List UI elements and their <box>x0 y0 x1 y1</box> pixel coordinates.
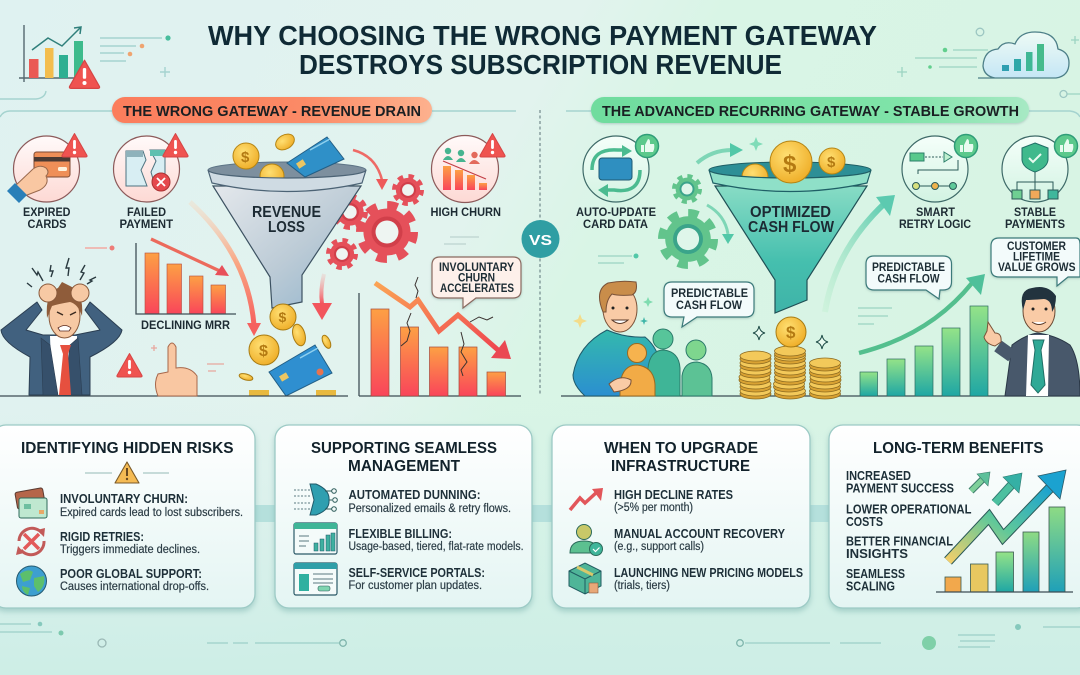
callout: predictable cash flow 1: CASH FLOW <box>676 300 742 312</box>
coin stacks <box>739 317 841 399</box>
item: poor global support: POOR GLOBAL SUPPORT: <box>60 567 202 581</box>
item: self-service portals: SELF-SERVICE PORTALS: <box>348 566 485 580</box>
divider with VS badge: VS <box>529 232 552 249</box>
panel: long-term benefits <box>829 425 1080 608</box>
callout: predictable cash flow 1 <box>664 282 754 327</box>
item: involuntary churn: Expired cards lead to lost subscribers. <box>60 507 243 519</box>
left heading pill: THE WRONG GATEWAY - REVENUE DRAIN <box>123 103 421 120</box>
icon: stable payments <box>1002 134 1078 231</box>
funnel label: OPTIMIZED <box>750 204 831 221</box>
label <box>899 207 971 231</box>
right heading pill <box>591 97 1029 123</box>
funnel: optimized cash flow <box>709 141 871 313</box>
label: HIGH CHURN <box>430 207 501 219</box>
funnel: optimized cash flow: $ <box>827 154 836 171</box>
item: manual account recovery <box>570 524 786 556</box>
benefit list: SEAMLESS <box>846 567 905 581</box>
decorative header lines left <box>0 35 1080 117</box>
benefit list: SCALING <box>846 580 895 594</box>
item: automated dunning <box>294 484 511 515</box>
benefit list: INSIGHTS <box>846 547 908 561</box>
right heading pill: THE ADVANCED RECURRING GATEWAY - STABLE GROWTH <box>602 103 1019 120</box>
label: CARD DATA <box>583 219 648 231</box>
ground lines left <box>0 395 521 397</box>
item: automated dunning: AUTOMATED DUNNING: <box>348 488 480 502</box>
callout: customer lifetime value: CUSTOMER <box>1007 241 1067 253</box>
coin stacks: $ <box>786 323 796 342</box>
benefit list: LOWER OPERATIONAL <box>846 502 972 516</box>
label <box>120 207 173 231</box>
small warning and pointing hand <box>85 246 224 396</box>
panel: when to upgrade infrastructure <box>552 425 810 608</box>
item: high decline rates: HIGH DECLINE RATES <box>614 488 733 502</box>
title: DESTROYS SUBSCRIPTION REVENUE <box>299 49 782 80</box>
label: AUTO-UPDATE <box>576 207 656 219</box>
heading: SUPPORTING SEAMLESS <box>311 440 497 457</box>
item: launching new pricing models: LAUNCHING NEW PRICING MODELS <box>614 566 803 580</box>
heading: MANAGEMENT <box>348 458 460 475</box>
growth chart <box>936 470 1073 592</box>
falling coins and card: $ <box>259 343 268 360</box>
item: poor global support: Causes international drop-offs. <box>60 581 209 593</box>
item: high decline rates: (>5% per month) <box>614 502 693 514</box>
icon: warning divider <box>85 462 169 483</box>
icon: failed payment <box>114 134 188 231</box>
callout: involuntary churn: INVOLUNTARY <box>439 262 514 274</box>
funnel label: REVENUE <box>252 204 321 221</box>
label: RETRY LOGIC <box>899 219 971 231</box>
ground line right <box>561 395 1080 397</box>
decorative footer elements <box>0 622 1080 650</box>
icon: expired cards <box>7 134 87 231</box>
gears: red <box>329 150 421 267</box>
callout: predictable cash flow 2: CASH FLOW <box>878 274 940 286</box>
benefit list: INCREASED <box>846 469 911 483</box>
label <box>576 207 656 231</box>
benefit list <box>846 469 972 594</box>
item: automated dunning: Personalized emails & retry flows. <box>348 503 511 515</box>
callout: customer lifetime value <box>991 238 1080 286</box>
funnel label: CASH FLOW <box>748 219 834 236</box>
label <box>1005 207 1065 231</box>
item: flexible billing: FLEXIBLE BILLING: <box>348 527 452 541</box>
title <box>208 20 877 80</box>
funnel: optimized cash flow: $ <box>783 151 797 178</box>
big green growth arrow <box>825 195 895 312</box>
item: manual account recovery: MANUAL ACCOUNT RECOVERY <box>614 527 786 541</box>
callout: predictable cash flow 2: PREDICTABLE <box>872 262 945 274</box>
item: flexible billing <box>294 523 524 554</box>
label: CARDS <box>28 219 67 231</box>
frustrated businessman <box>1 258 122 395</box>
benefit list: PAYMENT SUCCESS <box>846 482 954 496</box>
panel: identifying hidden risks <box>0 425 255 608</box>
title: WHY CHOOSING THE WRONG PAYMENT GATEWAY <box>208 20 877 51</box>
icon: chart with warning <box>19 25 100 88</box>
item: launching new pricing models <box>569 563 803 594</box>
heading <box>311 440 497 475</box>
cracked revenue bar chart <box>359 237 511 396</box>
item: rigid retries: Triggers immediate declines. <box>60 544 200 556</box>
funnel label: LOSS <box>268 219 305 236</box>
item: involuntary churn: INVOLUNTARY CHURN: <box>60 492 188 506</box>
big orange arrow <box>190 202 261 336</box>
benefit list: COSTS <box>846 515 883 529</box>
callout: involuntary churn <box>432 257 521 308</box>
icon: cloud with bars <box>897 28 1080 98</box>
divider with VS badge <box>522 110 560 395</box>
heading: WHEN TO UPGRADE <box>604 440 758 457</box>
heading <box>604 440 758 475</box>
callout: involuntary churn: CHURN <box>458 272 495 284</box>
item: high decline rates <box>570 488 733 514</box>
label: FAILED <box>127 207 166 219</box>
icon: auto-update card data <box>576 134 658 231</box>
item: poor global support <box>16 566 209 596</box>
label <box>23 207 70 231</box>
callout: predictable cash flow 2 <box>866 256 952 299</box>
item: rigid retries: RIGID RETRIES: <box>60 530 144 544</box>
label: PAYMENTS <box>1005 219 1065 231</box>
item: self-service portals: For customer plan updates. <box>348 580 482 592</box>
declining MRR chart <box>136 239 236 332</box>
declining MRR chart: DECLINING MRR <box>141 320 231 332</box>
label: PAYMENT <box>120 219 173 231</box>
funnel: revenue loss: $ <box>241 149 250 166</box>
label: EXPIRED <box>23 207 70 219</box>
item: manual account recovery: (e.g., support calls) <box>614 541 704 553</box>
item: flexible billing: Usage-based, tiered, flat-rate models. <box>348 541 524 553</box>
funnel: revenue loss <box>208 131 366 308</box>
heading: IDENTIFYING HIDDEN RISKS <box>21 440 234 457</box>
label: STABLE <box>1014 207 1056 219</box>
item: rigid retries <box>16 528 200 556</box>
callout: involuntary churn: ACCELERATES <box>440 283 514 295</box>
heading: INFRASTRUCTURE <box>611 458 750 475</box>
label: SMART <box>916 207 955 219</box>
businessman pointing <box>984 287 1080 396</box>
item: launching new pricing models: (trials, tiers) <box>614 580 670 592</box>
gears: green and arrows <box>598 137 763 264</box>
left heading pill <box>112 97 432 123</box>
heading: LONG-TERM BENEFITS <box>873 440 1044 457</box>
icon: smart retry logic <box>899 134 978 231</box>
falling coins and card: $ <box>278 309 286 325</box>
happy customer with group <box>573 281 712 396</box>
callout: predictable cash flow 1: PREDICTABLE <box>671 288 748 300</box>
falling coins and card <box>238 274 336 396</box>
item: involuntary churn <box>15 488 243 519</box>
benefit list: BETTER FINANCIAL <box>846 534 953 548</box>
panel: supporting seamless management <box>275 425 532 608</box>
card connectors <box>250 505 835 522</box>
funnel label <box>252 204 321 236</box>
growth bar chart <box>858 274 988 396</box>
funnel label <box>748 204 834 236</box>
icon: high churn <box>430 134 505 219</box>
item: self-service portals <box>294 563 485 595</box>
callout: customer lifetime value: LIFETIME <box>1013 252 1060 264</box>
